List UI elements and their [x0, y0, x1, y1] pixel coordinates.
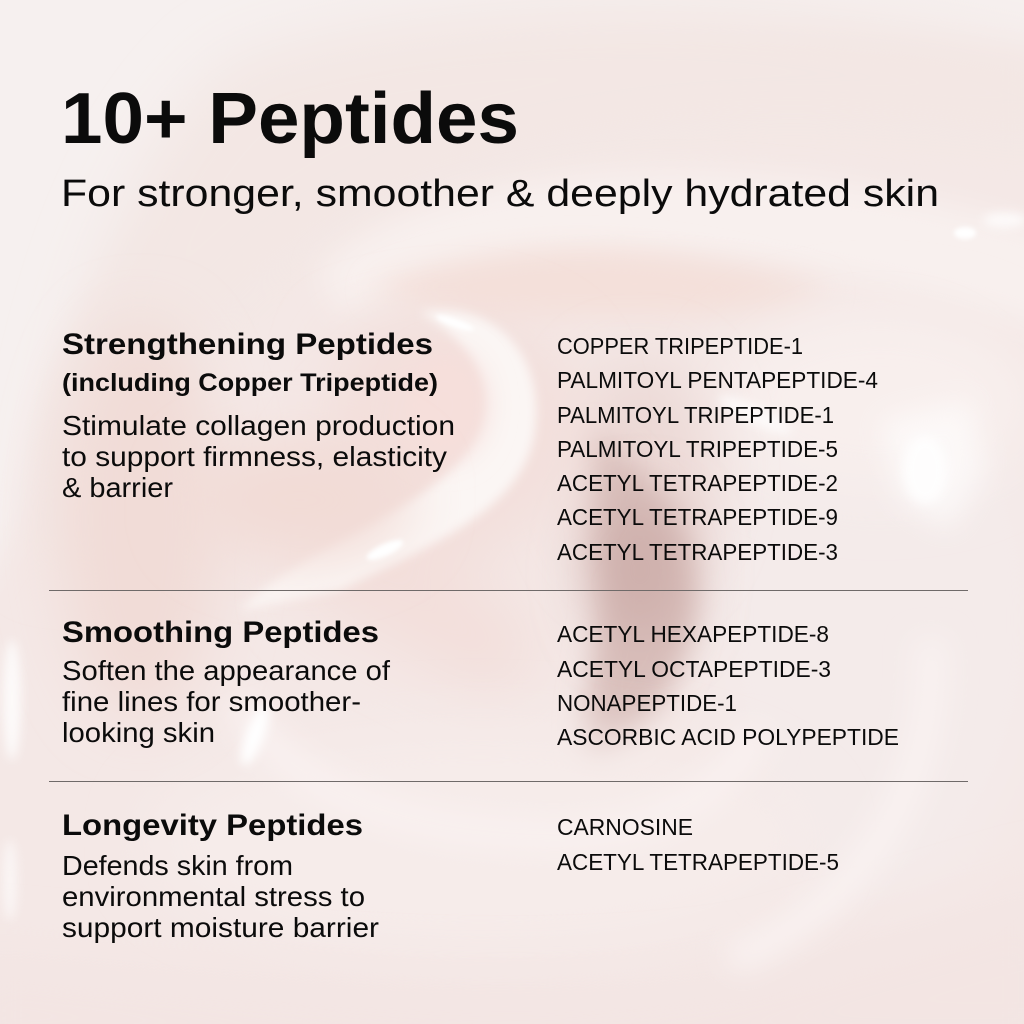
description: smoothing: fine lines for smoother- — [62, 686, 361, 717]
heading: smoothing peptides: Smoothing Peptides — [62, 616, 379, 649]
ingredient list: smoothing: NONAPEPTIDE-1 — [557, 690, 737, 716]
description: smoothing: Soften the appearance of — [62, 655, 390, 686]
description: smoothing — [62, 655, 390, 748]
ingredient list: strengthening: PALMITOYL TRIPEPTIDE-5 — [557, 436, 838, 462]
description: longevity: environmental stress to — [62, 881, 365, 912]
ingredient list: strengthening: ACETYL TETRAPEPTIDE-3 — [557, 539, 838, 565]
ingredient list: strengthening: ACETYL TETRAPEPTIDE-2 — [557, 470, 838, 496]
ingredient list: smoothing — [557, 621, 899, 750]
ingredient list: strengthening: ACETYL TETRAPEPTIDE-9 — [557, 504, 838, 530]
description: longevity — [62, 850, 379, 943]
panel: longevity peptides — [62, 809, 839, 943]
ingredient list: strengthening: PALMITOYL TRIPEPTIDE-1 — [557, 402, 834, 428]
description: strengthening: Stimulate collagen production — [62, 410, 455, 441]
ingredient list: longevity: ACETYL TETRAPEPTIDE-5 — [557, 849, 839, 875]
description: strengthening: to support firmness, elasticity — [62, 441, 447, 472]
panel: smoothing peptides — [62, 616, 899, 750]
ingredient list: strengthening — [557, 333, 878, 565]
heading: strengthening peptides: Strengthening Peptides — [62, 328, 433, 361]
heading: longevity peptides: Longevity Peptides — [62, 809, 363, 842]
ingredient list: smoothing: ACETYL HEXAPEPTIDE-8 — [557, 621, 829, 647]
description: longevity: support moisture barrier — [62, 912, 379, 943]
ingredient list: strengthening: COPPER TRIPEPTIDE-1 — [557, 333, 803, 359]
ingredient list: smoothing: ASCORBIC ACID POLYPEPTIDE — [557, 724, 899, 750]
subheading: including copper tripeptide: (including Copper Tripeptide) — [62, 369, 438, 397]
description: smoothing: looking skin — [62, 717, 215, 748]
panel: strengthening peptides — [62, 328, 878, 565]
ingredient list: strengthening: PALMITOYL PENTAPEPTIDE-4 — [557, 367, 878, 393]
description: strengthening: & barrier — [62, 472, 173, 503]
description: longevity: Defends skin from — [62, 850, 293, 881]
ingredient list: longevity — [557, 814, 839, 875]
ingredient list: smoothing: ACETYL OCTAPEPTIDE-3 — [557, 656, 831, 682]
ingredient list: longevity: CARNOSINE — [557, 814, 693, 840]
description: strengthening — [62, 410, 455, 503]
title: 10+ Peptides — [61, 79, 519, 159]
subtitle: For stronger, smoother & deeply hydrated skin — [61, 173, 939, 215]
